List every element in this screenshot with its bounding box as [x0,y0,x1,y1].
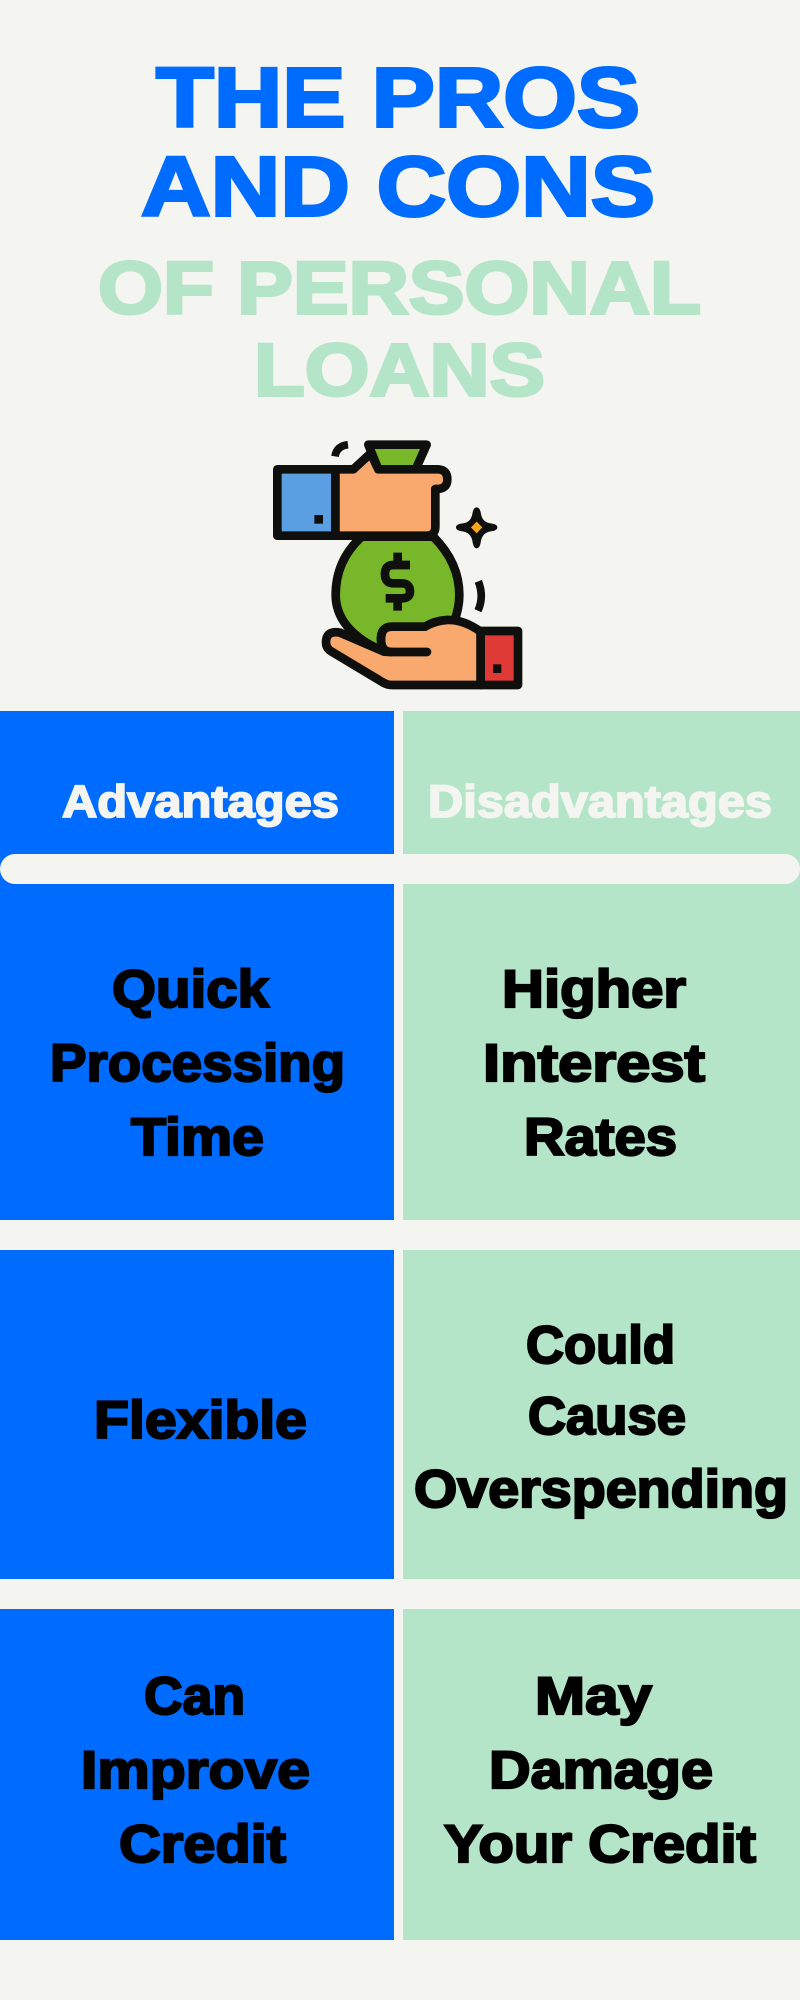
text: quick processing time: Processing [50,1034,345,1093]
icon: blue sleeve button [314,515,323,524]
subtitle line: of personal: OF PERSONAL [98,246,701,330]
icon: motion arc top left [335,445,348,456]
text: can improve credit: Can [144,1667,245,1726]
text: flexible: Flexible [94,1391,307,1450]
text: quick processing time: Quick [112,960,270,1019]
icon: motion arc right [478,581,481,611]
text: higher interest rates: Rates [524,1108,677,1167]
text: could cause overspending [414,1316,788,1519]
panel: could cause overspending [403,1250,800,1579]
text: higher interest rates: Higher [502,960,686,1019]
text: can improve credit: Improve [81,1741,310,1800]
panel: disadvantages header [403,711,800,884]
title line: the pros: THE PROS [156,50,640,144]
text: can improve credit [81,1667,310,1874]
icon: lower hand [326,620,481,685]
panel: quick processing time [0,884,394,1220]
text: could cause overspending: Cause [528,1387,686,1446]
icon: red sleeve button [493,664,501,673]
panel: flexible [0,1250,394,1579]
text: higher interest rates: Interest [483,1034,705,1093]
panel: advantages header [0,711,394,884]
text: may damage your credit: May [535,1667,653,1726]
text: quick processing time [50,960,345,1167]
panel: can improve credit [0,1609,394,1940]
icon: red sleeve [481,631,518,685]
icon: lower hand thumb line [381,627,427,652]
heading: disadvantages: Disadvantages [428,776,772,827]
icon: money bag body [336,537,459,650]
icon: hand passing money bag to another hand [277,445,518,685]
icon: blue sleeve [277,469,335,536]
panel: may damage your credit [403,1609,800,1940]
text: can improve credit: Credit [119,1815,286,1874]
rounded divider bar [0,854,800,884]
text: quick processing time: Time [131,1108,264,1167]
text: may damage your credit: Damage [489,1741,713,1800]
text: may damage your credit: Your Credit [444,1815,756,1874]
icon: sparkle [456,507,497,548]
icon: upper hand [335,453,447,536]
heading: advantages: Advantages [62,776,339,827]
text: may damage your credit [444,1667,756,1874]
icon: dollar sign [385,553,410,611]
title [98,50,701,412]
panel: higher interest rates [403,884,800,1220]
title line: and cons: AND CONS [141,140,655,234]
text: higher interest rates [483,960,705,1167]
text: could cause overspending: Could [526,1316,675,1375]
icon: money bag neck [368,445,427,469]
subtitle line: loans: LOANS [254,328,545,412]
text: could cause overspending: Overspending [414,1460,788,1519]
